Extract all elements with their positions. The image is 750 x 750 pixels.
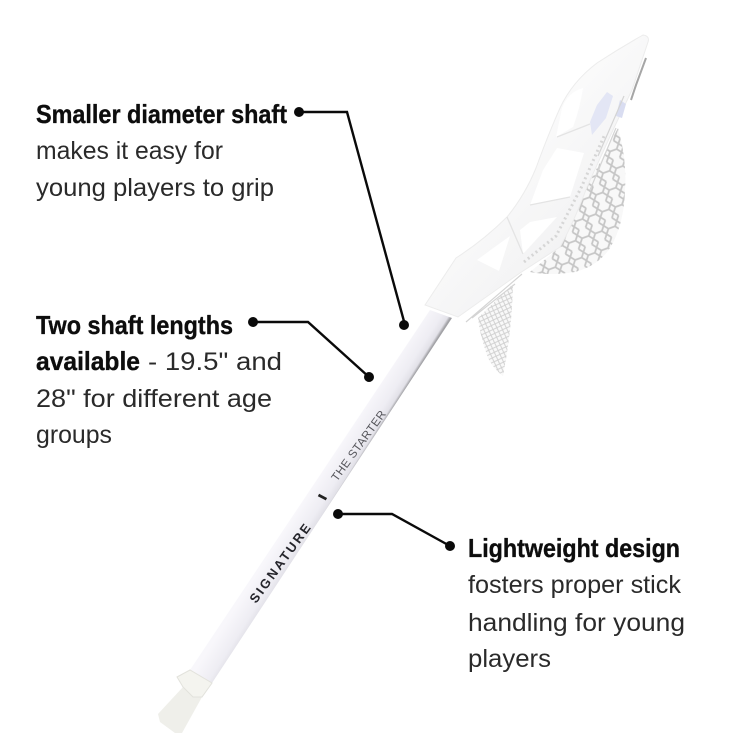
shaft separator xyxy=(318,494,327,500)
butt end collar and cap xyxy=(158,670,212,733)
text block: lightweight design: Lightweight design xyxy=(468,533,680,563)
shaft text: signature: SIGNATURE xyxy=(246,521,314,606)
text block: lightweight design xyxy=(468,533,685,673)
text block: smaller diameter shaft: makes it easy for xyxy=(36,137,223,165)
text block: lightweight design: players xyxy=(468,645,551,673)
text block: two shaft lengths: available xyxy=(36,346,140,376)
lavender head label xyxy=(590,92,613,135)
text block: two shaft lengths: groups xyxy=(36,421,112,449)
text block: smaller diameter shaft: young players to grip xyxy=(36,174,274,202)
lacrosse head xyxy=(425,35,648,322)
text block: two shaft lengths xyxy=(36,310,282,449)
lacrosse stick xyxy=(158,35,648,733)
sidewall laces xyxy=(466,96,624,322)
scoop edge shading xyxy=(631,58,646,100)
text block: two shaft lengths: - 19.5" and xyxy=(148,348,282,376)
sidewall lace holes xyxy=(524,134,605,262)
lower net xyxy=(478,284,513,376)
head windows xyxy=(477,88,584,271)
text block: two shaft lengths: Two shaft lengths xyxy=(36,310,233,340)
stick shaft xyxy=(190,310,452,683)
sidewall strut shadows xyxy=(507,124,590,254)
callout leader: lightweight design xyxy=(333,509,455,551)
text block: lightweight design: fosters proper stick xyxy=(468,571,681,599)
shaft text: the starter: THE STARTER xyxy=(330,409,389,484)
text block: smaller diameter shaft: Smaller diameter shaft xyxy=(36,99,287,129)
text block: lightweight design: handling for young xyxy=(468,609,685,637)
text block: two shaft lengths: 28" for different age xyxy=(36,385,272,413)
pocket net xyxy=(530,128,625,274)
callout leader: two shaft lengths xyxy=(248,317,374,382)
text block: smaller diameter shaft xyxy=(36,99,287,202)
callout leader: smaller diameter shaft xyxy=(294,107,409,330)
